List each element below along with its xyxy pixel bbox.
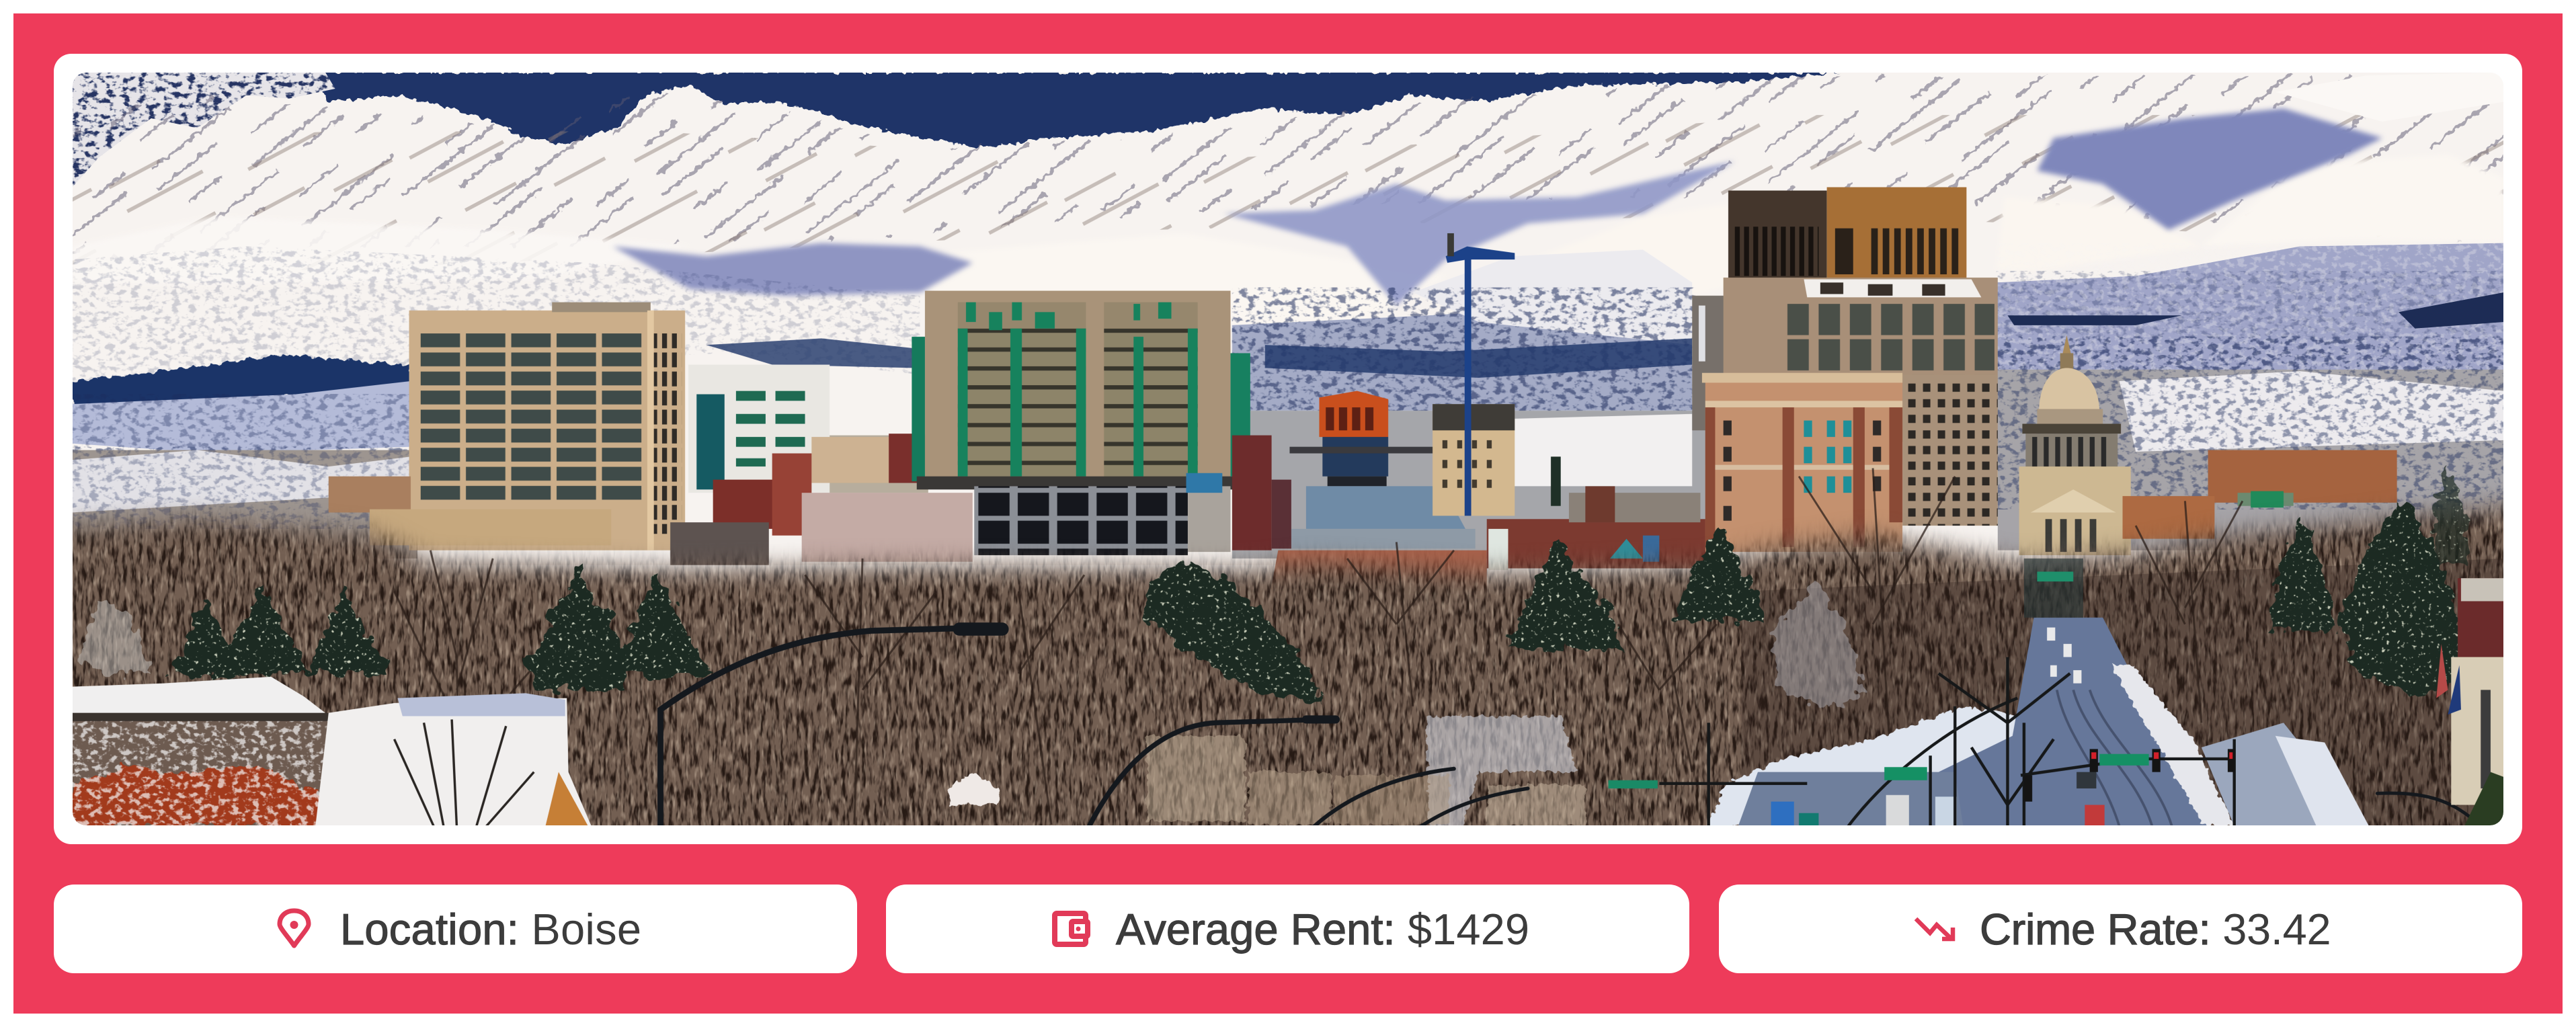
mixed forest at far left — [73, 73, 352, 190]
red shrub — [73, 766, 381, 826]
lavender shadows on far hills — [613, 108, 2382, 306]
streaked upper ridges — [73, 75, 2503, 263]
icon: wallet — [1055, 913, 1088, 944]
lower right blue hills — [1996, 243, 2503, 460]
lower left speckled hills — [73, 247, 926, 395]
building: parking garage — [802, 436, 1291, 562]
town behind the trees — [73, 337, 2503, 559]
frosted grey tree — [1771, 583, 1865, 710]
traffic signals and green signs — [1609, 657, 2235, 826]
building: brick blocks — [670, 434, 925, 565]
lower podium — [1705, 374, 1902, 552]
icon: trending down arrow — [1916, 919, 1953, 940]
conifer trees — [171, 466, 2471, 703]
dark tree belts — [73, 355, 411, 407]
label: location: Location: Boise — [340, 905, 641, 954]
capitol boulevard traffic — [2024, 559, 2083, 618]
label: crime rate: Crime Rate: 33.42 — [1980, 905, 2331, 954]
panel: photo card — [54, 54, 2522, 844]
dark forest on upper ridgeline — [312, 73, 1840, 148]
bare tree branches — [395, 468, 2243, 825]
snowy foothills — [73, 73, 2503, 565]
building: white and teal block — [688, 365, 893, 493]
low sandstone wall — [370, 509, 611, 545]
tree at left edge with snow — [79, 600, 151, 677]
building: brown block right of capitol — [2122, 450, 2397, 539]
street lights — [660, 628, 2481, 826]
icon: map pin — [280, 911, 309, 946]
building: brick low-rise with clock — [1265, 456, 1709, 621]
smooth ridge highlights — [73, 217, 690, 282]
building: beige office tower — [329, 302, 685, 550]
icon: blue construction crane — [1446, 233, 1515, 516]
blue snow slope left — [73, 381, 411, 454]
snowy yards and road — [1709, 559, 2369, 826]
building: tall brown tower with crown — [1692, 188, 1998, 552]
building: orange construction and glass atrium — [1289, 391, 1476, 548]
stat pill: crime rate — [1719, 885, 2522, 973]
stat pill: average rent — [886, 885, 1689, 973]
centre dark hillside with snow — [1232, 299, 1692, 411]
small buildings in lower centre — [950, 716, 1585, 826]
building: small tan tower — [1433, 404, 1515, 516]
building: central apartment tower with green glass — [912, 291, 1250, 489]
photo: Boise skyline in winter — [73, 73, 2503, 826]
building: Idaho State Capitol dome — [2019, 335, 2131, 555]
tree canopy — [73, 477, 2503, 826]
houses at bottom left — [73, 677, 592, 826]
stat pill: location — [54, 885, 857, 973]
label: average rent: Average Rent: $1429 — [1116, 905, 1529, 954]
buildings at far right edge — [2436, 578, 2503, 826]
